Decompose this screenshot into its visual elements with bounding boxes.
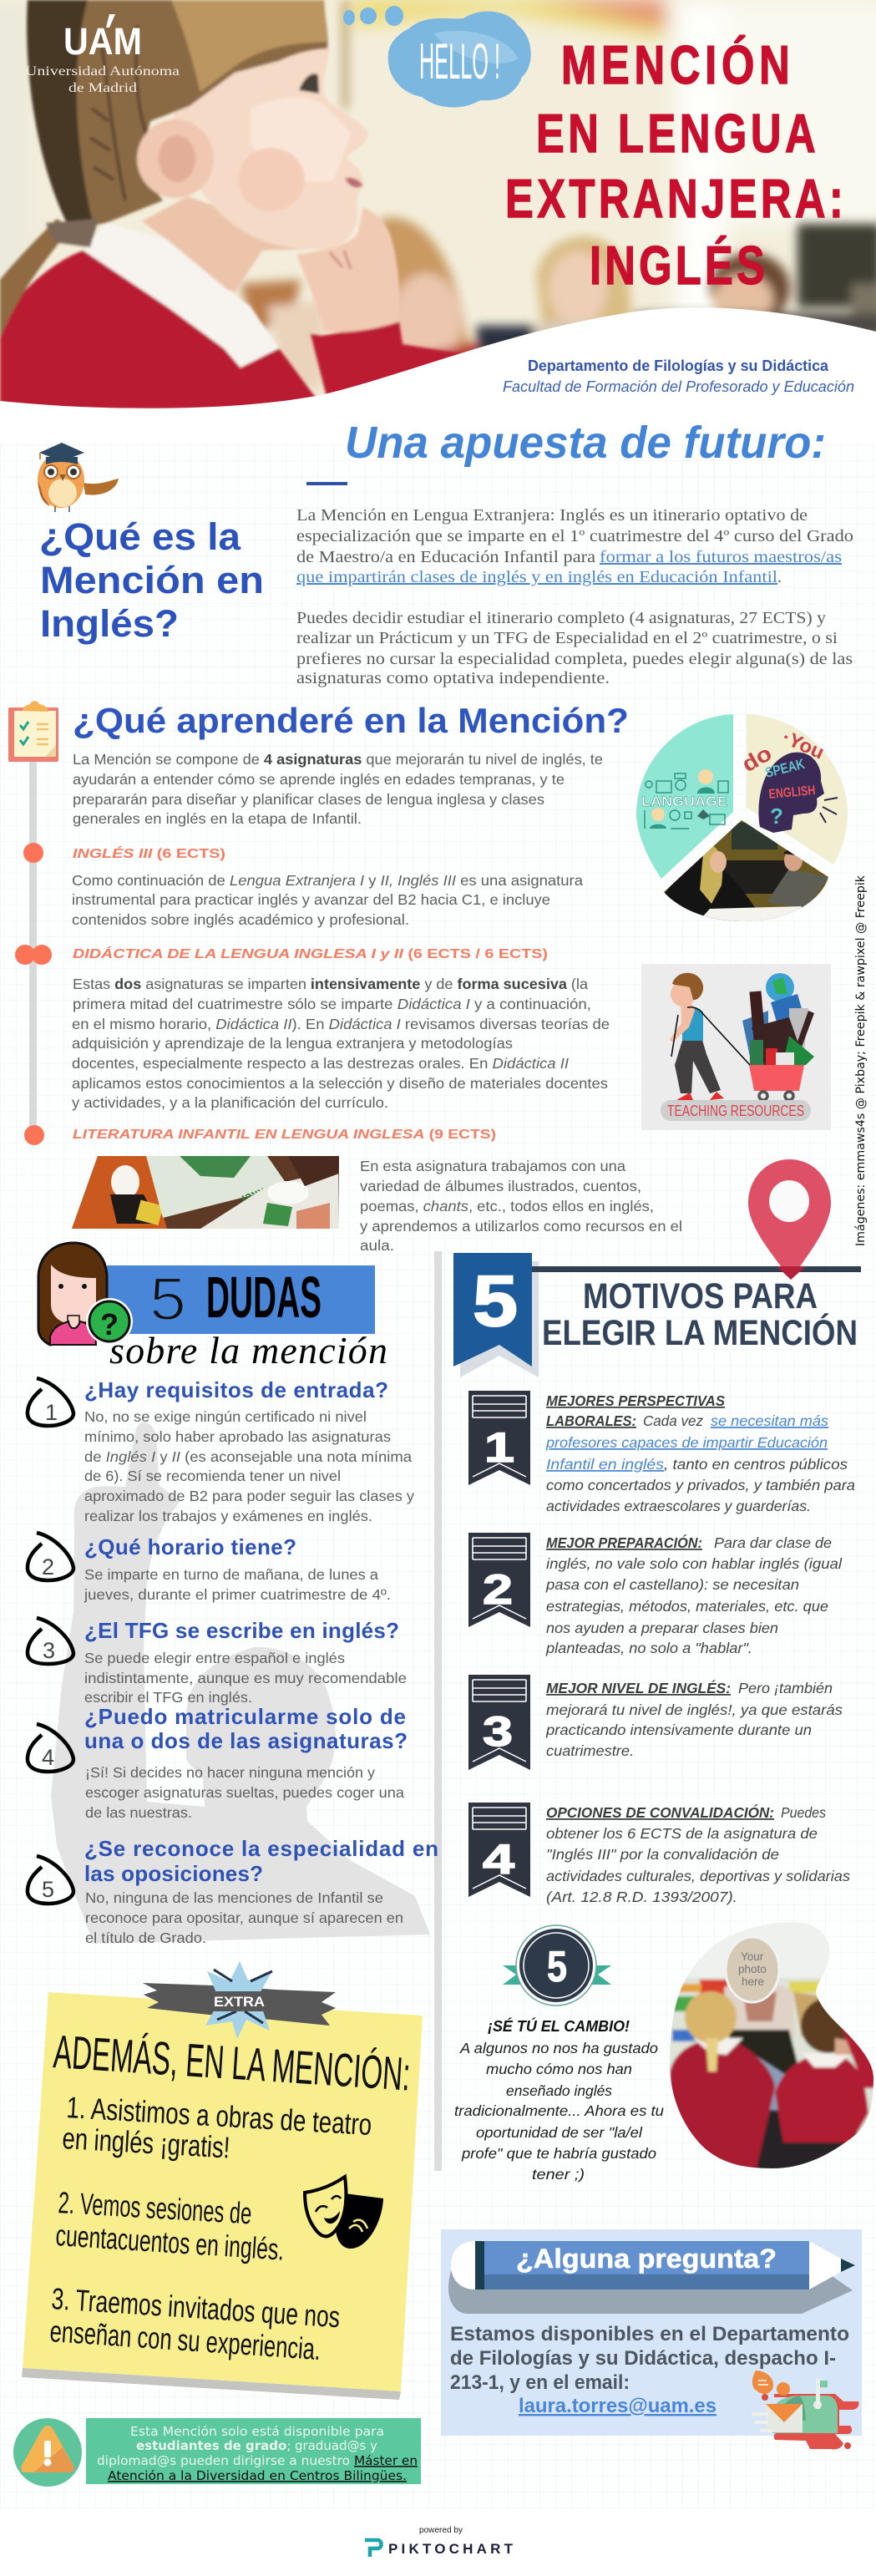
- reason 3: practicando intensivamente durante un: [545, 1722, 812, 1738]
- heading: 5 motivos: MOTIVOS PARA: [583, 1276, 818, 1316]
- text block: intro: formar a los futuros maestros/as: [600, 548, 842, 566]
- reason 1: actividades extraescolares y guarderías.: [546, 1498, 811, 1514]
- subject: ingles III: contenidos sobre inglés académico y profesional.: [72, 911, 409, 928]
- resources pill: [661, 1100, 811, 1121]
- extra note: [22, 1961, 423, 2400]
- doubt 5: ¿Se reconoce la especialidad en: [84, 1836, 438, 1861]
- badge 3: [468, 1675, 530, 1770]
- blob photo: teacher and pupils: here: [742, 1975, 764, 1988]
- hand: [296, 207, 400, 332]
- reason 4: Puedes: [781, 1804, 826, 1821]
- title: EN LENGUA: [536, 104, 816, 164]
- subject: didactica: Estas dos asignaturas se imparten intensivamente y de forma sucesiva (la: [73, 976, 588, 992]
- pie segment: students photo: [664, 820, 828, 921]
- text block: intro: prefieres no cursar la especialidad completa, puedes elegir alguna(s) de las: [296, 650, 853, 668]
- reason 2: estrategias, métodos, materiales, etc. que: [546, 1598, 828, 1615]
- doubt 4: ¿Puedo matricularme solo de: [84, 1704, 406, 1729]
- subject: literatura: [73, 1128, 682, 1254]
- heading: 5 dudas sobre la mencion: [38, 1243, 387, 1372]
- subject: didactica: en el mismo horario, Didáctica II ). En Didáctica I revisamos diversas teorías de: [72, 1016, 610, 1032]
- left pupil: [670, 2038, 775, 2172]
- sweater: [0, 251, 330, 409]
- icon: girl with question: [38, 1243, 133, 1345]
- UAM logo: [25, 14, 180, 95]
- badge 2: [468, 1533, 530, 1627]
- doubt 1: No, no se exige ningún certificado ni nivel: [84, 1408, 367, 1425]
- doubt 4: de las nuestras.: [85, 1804, 192, 1821]
- reason 4: "Inglés III" por la convalidación de: [546, 1846, 779, 1863]
- subject: didactica: [72, 947, 610, 1111]
- doubt 4: [28, 1704, 408, 1821]
- reason 5 text: tradicionalmente... Ahora es tu: [454, 2102, 664, 2119]
- right column divider: [434, 1251, 442, 2171]
- subject: didactica: docentes, especialmente respecto a las destrezas orales. En Didáctica II: [72, 1055, 569, 1072]
- doubt 3: [28, 1618, 407, 1706]
- reason 2: inglés, no vale solo con hablar inglés (igual: [546, 1555, 843, 1572]
- heading: 5 motivos: [453, 1253, 861, 1377]
- thought cloud HELLO: [343, 6, 531, 108]
- icon: girl with question: ?: [100, 1307, 119, 1341]
- reason 5 badge: 5: [547, 1943, 567, 1991]
- icon: owl with graduation cap: [38, 443, 119, 512]
- extra note: ADEMÁS, EN LA MENCIÓN:: [52, 2025, 412, 2101]
- subject: literatura: LITERATURA INFANTIL EN LENGUA INGLESA (9 ECTS): [73, 1128, 496, 1142]
- reason 5 text: A algunos no nos ha gustado: [459, 2040, 658, 2056]
- contact panel: [441, 2229, 862, 2436]
- text block: intro: especialización que se imparte en el 1º cuatrimestre del 4º curso del Grado: [296, 527, 853, 545]
- extra note: 2. Vemos sesiones de: [58, 2185, 253, 2230]
- reason 3: MEJOR NIVEL DE INGLÉS:: [546, 1679, 731, 1696]
- extra note: cuentacuentos en inglés.: [54, 2218, 286, 2267]
- heading: una apuesta de futuro: Una apuesta de futuro:: [345, 418, 826, 468]
- heading: que es la mencion: [39, 515, 264, 645]
- reason 2: planteadas, no solo a "hablar".: [545, 1640, 752, 1656]
- doubt 5: el título de Grado.: [85, 1929, 206, 1946]
- doubt 1: [28, 1377, 414, 1524]
- pie segment: do you speak english: SPEAK: [763, 756, 807, 781]
- powered by piktochart: powered by: [419, 2525, 463, 2535]
- badge 1: [468, 1391, 530, 1485]
- doubt 3: Se puede elegir entre español e inglés: [84, 1650, 345, 1666]
- reason 3: Pero ¡también: [738, 1680, 833, 1696]
- heading: 5 motivos: 5: [473, 1261, 518, 1341]
- heading: 5 dudas sobre la mencion: DUDAS: [206, 1265, 322, 1330]
- subject: ingles III: instrumental para practicar inglés y avanzar del B2 hacia C1, e incluye: [72, 891, 550, 908]
- heading: que es la mencion: ¿Qué es la: [39, 515, 241, 558]
- timeline: [15, 756, 52, 1145]
- reason 1: se necesitan más: [711, 1412, 828, 1429]
- badge 3: 3: [483, 1708, 513, 1755]
- contact panel: 213-1, y en el email:: [450, 2371, 630, 2394]
- title: INGLÉS: [590, 236, 765, 296]
- pie segment: language: LANGUAGE: [641, 794, 727, 809]
- reason 5 text: profe" que te habría gustado: [461, 2145, 656, 2162]
- badge 4: [468, 1803, 530, 1897]
- cart with books: [742, 973, 814, 1100]
- neck: [142, 195, 301, 292]
- reason 4: OPCIONES DE CONVALIDACIÓN:: [546, 1803, 774, 1821]
- doubt 1: aproximado de B2 para poder seguir las clases y: [84, 1488, 414, 1504]
- illustration: teaching resources: [641, 964, 831, 1130]
- text block: asignaturas: La Mención se compone de 4 asignaturas que mejorarán tu nivel de inglés, te: [73, 751, 603, 768]
- text block: intro: asignaturas como optativa independiente.: [296, 669, 610, 687]
- title: MENCIÓN: [561, 35, 790, 95]
- doubt 2: jueves, durante el primer cuatrimestre de 4º.: [84, 1586, 391, 1603]
- badge 4: 4: [483, 1836, 514, 1883]
- doubt 3: escribir el TFG en inglés.: [84, 1689, 252, 1706]
- notice: [13, 2418, 421, 2487]
- text block: asignaturas: generales en inglés en la etapa de Infantil.: [73, 810, 362, 827]
- reason 5 badge: [503, 1925, 611, 2006]
- UAM logo: de Madrid: [68, 81, 137, 95]
- blob photo: teacher and pupils: Your: [741, 1950, 764, 1963]
- reason 1: profesores capaces de impartir Educación: [545, 1434, 828, 1451]
- doubt 4: una o dos de las asignaturas?: [84, 1728, 408, 1753]
- map pin: [748, 1159, 831, 1280]
- pie segment: do you speak english: do: [737, 740, 776, 777]
- extra badge: [143, 1961, 336, 2039]
- reason 4: actividades culturales, deportivas y solidarias: [546, 1868, 850, 1884]
- photo: picture books: Kikker: [238, 1180, 279, 1207]
- doubt 5: [28, 1836, 438, 1946]
- reason 1: como concertados y privados, y también para: [546, 1477, 855, 1493]
- reason 4: [468, 1803, 850, 1905]
- extra badge: EXTRA: [214, 1994, 265, 2010]
- text block: intro: [296, 506, 853, 687]
- pie of three images: [636, 714, 848, 927]
- subject: literatura: variedad de álbumes ilustrados, cuentos,: [360, 1178, 641, 1194]
- reason 5 text: oportunidad de ser "la/el: [476, 2124, 643, 2141]
- blob photo: teacher and pupils: photo: [738, 1963, 767, 1975]
- subject: literatura: En esta asignatura trabajamos con una: [360, 1158, 625, 1174]
- subject: ingles III: Como continuación de Lengua Extranjera I y II, Inglés III es una asignatura: [72, 872, 583, 889]
- reason 2: nos ayuden a preparar clases bien: [546, 1620, 778, 1636]
- notice: Esta Mención solo está disponible para: [130, 2424, 384, 2439]
- text block: intro: realizar un Prácticum y un TFG de Especialidad en el 2º cuatrimestre, o si: [296, 629, 838, 647]
- reason 1: [468, 1391, 855, 1514]
- subject: didactica: DIDÁCTICA DE LA LENGUA INGLESA I y II (6 ECTS / 6 ECTS): [73, 947, 548, 961]
- doubt 4: ¡Sí! Si decides no hacer ninguna mención y: [85, 1764, 375, 1781]
- illustration: teaching resources: TEACHING RESOURCES: [667, 1103, 804, 1119]
- reason 5 text: ¡SÉ TÚ EL CAMBIO!: [488, 2017, 630, 2035]
- face: [173, 0, 368, 249]
- braid: [0, 217, 62, 339]
- reason 5 text: [454, 2017, 664, 2183]
- doubt 3: indistintamente, aunque es muy recomendable: [84, 1670, 407, 1686]
- text block: asignaturas: [73, 751, 603, 827]
- doubt 4: escoger asignaturas sueltas, puedes coger una: [85, 1784, 404, 1801]
- eye and mouth: [299, 74, 319, 94]
- pie segment: do you speak english: ·You: [779, 726, 828, 763]
- reason 2: Para dar clase de: [714, 1534, 832, 1551]
- icon: mailbox with letter: [752, 2371, 859, 2449]
- contact panel: Estamos disponibles en el Departamento: [450, 2323, 849, 2345]
- reason 1: Cada vez: [643, 1412, 703, 1429]
- doubt 1: 1: [45, 1400, 58, 1425]
- thought cloud HELLO: HELLO !: [419, 33, 500, 89]
- doubt 1: de 6). Sí se recomienda tener un nivel: [84, 1468, 341, 1484]
- blob photo: teacher and pupils: [668, 1918, 876, 2174]
- title: EXTRANJERA:: [505, 169, 843, 229]
- doubt 1: mínimo, solo haber aprobado las asignaturas: [84, 1428, 391, 1445]
- subject: ingles III: [72, 847, 583, 928]
- heading: 5 dudas sobre la mencion: sobre la mención: [109, 1329, 387, 1372]
- pie segment: do you speak english: ENGLISH: [768, 783, 816, 802]
- reason 1: MEJORES PERSPECTIVAS: [546, 1392, 725, 1409]
- text block: intro: Puedes decidir estudiar el itinerario completo (4 asignaturas, 27 ECTS) y: [296, 609, 826, 627]
- heading: 5 dudas sobre la mencion: 5: [149, 1266, 186, 1333]
- badge 2: 2: [483, 1566, 513, 1613]
- text block: asignaturas: ayudarán a entender cómo se aprende inglés en edades tempranas, y te: [73, 771, 565, 788]
- icon: pencil: [448, 2241, 855, 2314]
- doubt 3: 3: [43, 1638, 55, 1663]
- powered by piktochart: [365, 2525, 514, 2557]
- image credit: Imágenes: emmaws4s @ Pixbay; Freepik & rawpixel @ Freepik: [854, 875, 868, 1246]
- doubt 4: 4: [42, 1745, 54, 1770]
- reason 5 text: enseñado inglés: [506, 2082, 612, 2099]
- extra note: en inglés ¡gratis!: [62, 2121, 231, 2165]
- doubt 3: ¿El TFG se escribe en inglés?: [84, 1618, 399, 1643]
- extra note: 3. Traemos invitados que nos: [50, 2281, 341, 2334]
- subject: didactica: primera mitad del cuatrimestre sólo se imparte Didáctica I y a continuación,: [73, 996, 591, 1012]
- UAM logo: UAM: [63, 20, 142, 63]
- right pupil: [775, 2053, 868, 2142]
- text block: asignaturas: prepararán para diseñar y planificar clases de lengua inglesa y clases: [73, 791, 544, 808]
- silhouette of student raising a hand: [51, 1422, 430, 1944]
- text block: intro: La Mención en Lengua Extranjera: Inglés es un itinerario optativo de: [296, 506, 808, 525]
- icon: pencil: ¿Alguna pregunta?: [516, 2244, 777, 2274]
- subject: didactica: y actividades, y a la planificación del currículo.: [72, 1094, 388, 1111]
- reason 5 text: tener ;): [532, 2166, 585, 2183]
- reason 2: [468, 1533, 843, 1656]
- contact panel: de Filologías y su Didáctica, despacho I-: [450, 2347, 836, 2370]
- heading: que aprendere: ¿Qué aprenderé en la Mención?: [73, 701, 629, 740]
- text block: intro: que impartirán clases de inglés y en inglés en Educación Infantil: [296, 568, 777, 586]
- doubt 2: [28, 1533, 391, 1603]
- ear: [137, 119, 214, 198]
- boy: [670, 973, 750, 1100]
- powered by piktochart: PIKTOCHART: [388, 2541, 514, 2557]
- reason 4: (Art. 12.8 R.D. 1393/2007).: [546, 1889, 737, 1905]
- doubt 1: de Inglés I y II (es aconsejable una nota mínima: [84, 1448, 412, 1465]
- doubt 1: ¿Hay requisitos de entrada?: [84, 1377, 388, 1402]
- icon: clipboard: [8, 701, 58, 762]
- text block: intro: de Maestro/a en Educación Infantil para: [296, 548, 595, 566]
- subject: literatura: poemas, chants, etc., todos ellos en inglés,: [360, 1198, 654, 1214]
- subject: ingles III: INGLÉS III (6 ECTS): [73, 847, 225, 861]
- doubt 1: realizar los trabajos y exámenes en inglés.: [84, 1508, 372, 1524]
- hair: [74, 0, 329, 226]
- subject: didactica: adquisición y aprendizaje de la lengua extranjera y metodologías: [72, 1035, 513, 1052]
- reason 5 text: mucho cómo nos han: [486, 2061, 632, 2077]
- heading: que es la mencion: Inglés?: [40, 602, 179, 645]
- doubt 5: las oposiciones?: [84, 1861, 263, 1886]
- reason 3: mejorará tu nivel de inglés!, ya que estarás: [546, 1701, 843, 1718]
- notice: diplomad@s pueden dirigirse a nuestro: [97, 2453, 350, 2468]
- reason 1: Infantil en inglés: [546, 1456, 664, 1473]
- reason 4: obtener los 6 ECTS de la asignatura de: [546, 1825, 818, 1842]
- doubt 5: reconoce para opositar, aunque sí aparecen en: [85, 1909, 403, 1926]
- badge 1: 1: [484, 1424, 514, 1471]
- extra note: 1. Asistimos a obras de teatro: [66, 2090, 372, 2142]
- reason 2: MEJOR PREPARACIÓN:: [546, 1534, 702, 1551]
- photo: picture books: [72, 1156, 339, 1229]
- reason 1: LABORALES:: [546, 1412, 636, 1429]
- contact panel: laura.torres@uam.es: [519, 2395, 716, 2417]
- reason 3: cuatrimestre.: [546, 1742, 634, 1759]
- pie segment: do you speak english: [737, 714, 848, 865]
- reason 1: , tanto en centros públicos: [664, 1456, 848, 1473]
- doubt 2: ¿Qué horario tiene?: [84, 1534, 296, 1559]
- department and faculty: Departamento de Filologías y su Didáctica: [528, 357, 829, 374]
- doubt 5: 5: [42, 1877, 54, 1902]
- icon: theatre masks: [305, 2177, 383, 2249]
- notice: estudiantes de grado; graduad@s y: [136, 2438, 377, 2453]
- subject: literatura: aula.: [360, 1237, 394, 1254]
- subject: literatura: y aprendemos a utilizarlos como recursos en el: [360, 1218, 682, 1235]
- department and faculty: [503, 357, 854, 395]
- subject: didactica: aplicamos estos conocimientos a la selección y diseño de materiales docentes: [72, 1075, 608, 1092]
- text block: intro: .: [777, 568, 782, 586]
- doubt 2: 2: [42, 1554, 54, 1580]
- pie segment: language: [636, 714, 733, 879]
- heading: que es la mencion: Mención en: [40, 559, 264, 601]
- dark trousers: [753, 2108, 857, 2168]
- reason 3: [468, 1675, 843, 1770]
- title: [505, 35, 843, 296]
- notice: Atención a la Diversidad en Centros Bilingües.: [108, 2468, 407, 2483]
- notice: Máster en: [354, 2453, 418, 2468]
- doubt 2: Se imparte en turno de mañana, de lunes a: [84, 1566, 378, 1583]
- header photo: girl thinking in classroom: [0, 0, 876, 418]
- reason 2: pasa con el castellano): se necesitan: [545, 1576, 799, 1593]
- doubt 5: No, ninguna de las menciones de Infantil se: [85, 1889, 383, 1906]
- UAM logo: Universidad Autónoma: [25, 64, 180, 79]
- department and faculty: Facultad de Formación del Profesorado y Educación: [503, 378, 854, 395]
- pie segment: do you speak english: ?: [770, 804, 783, 829]
- collar: [84, 223, 279, 368]
- extra note: enseñan con su experiencia.: [48, 2314, 322, 2366]
